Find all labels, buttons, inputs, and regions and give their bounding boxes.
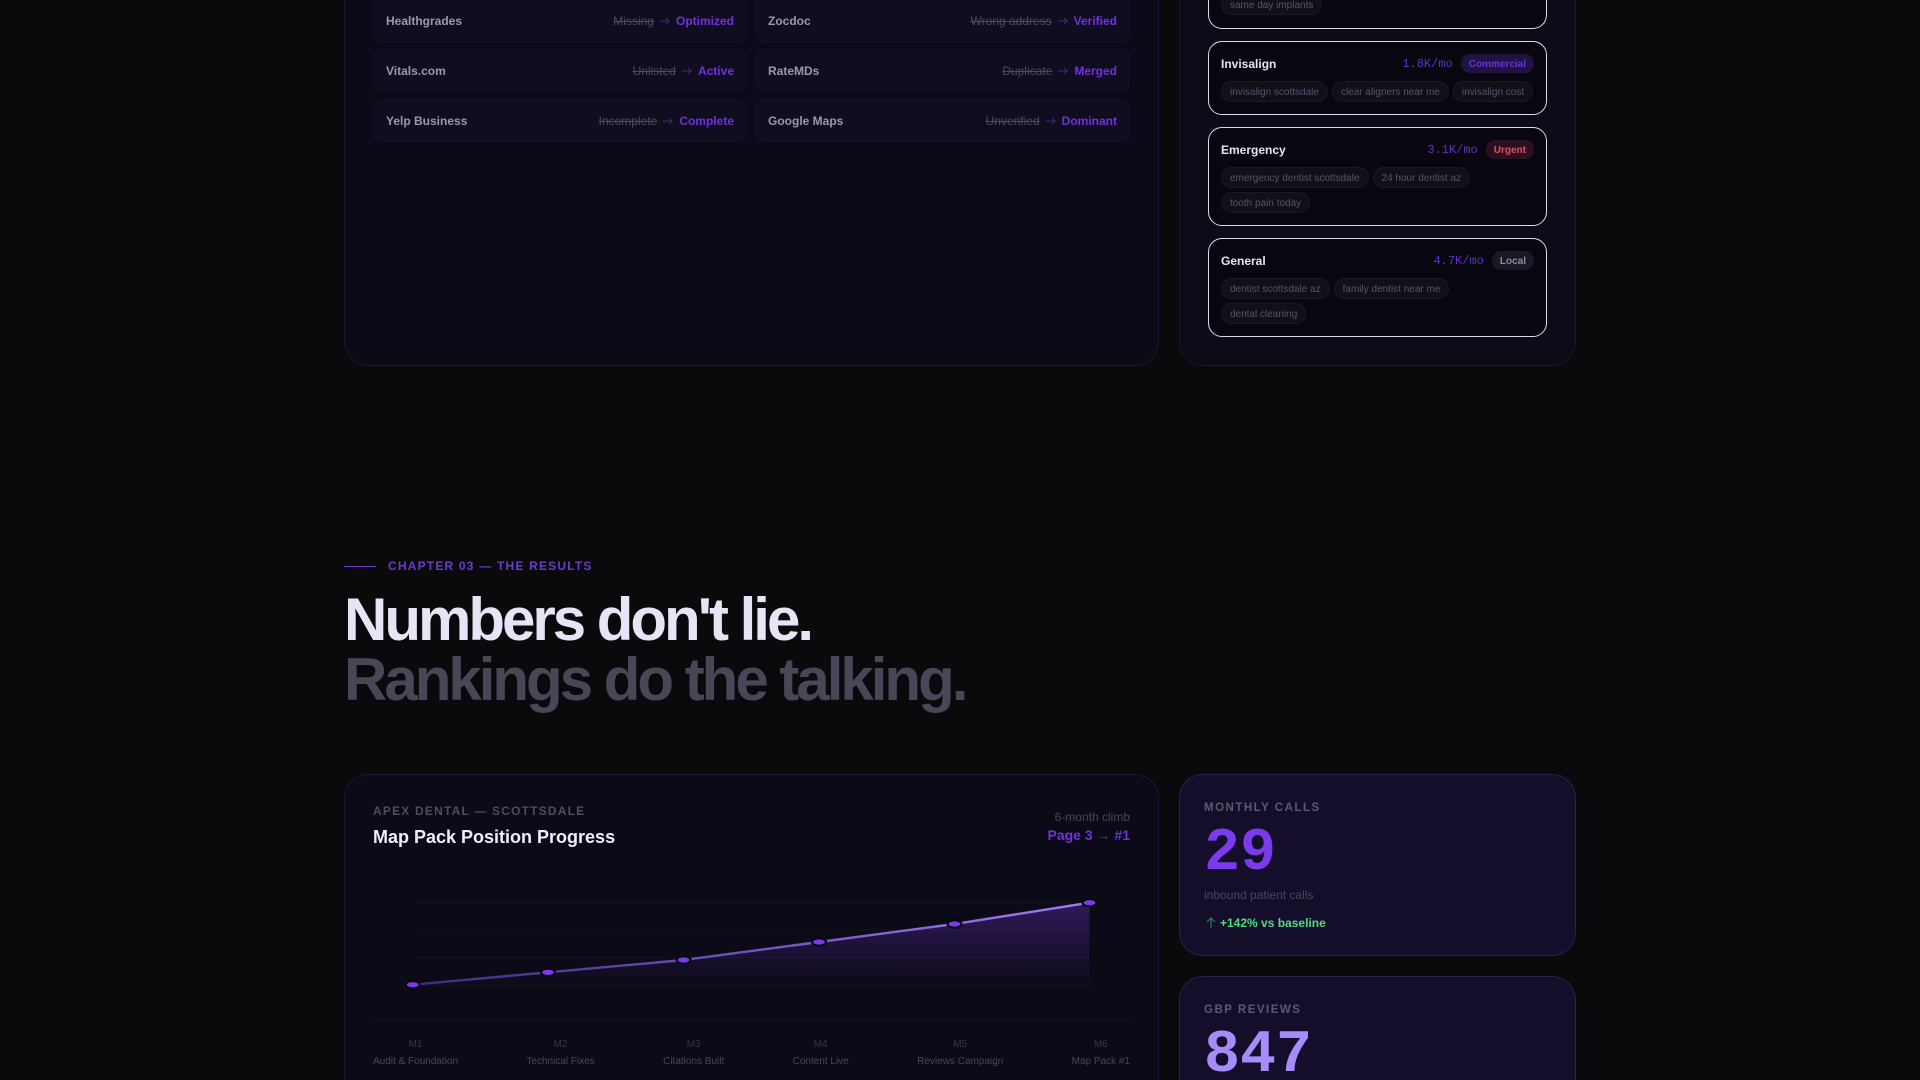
stat value: 29 <box>1204 820 1276 888</box>
citation row: Zocdoc: Zocdoc <box>768 14 811 28</box>
stat card: GBP reviews <box>1179 976 1576 1080</box>
keyword chips: dental cleaning <box>1230 309 1297 320</box>
ranking change: Page 3 → #1 <box>1048 827 1130 843</box>
icon: up arrow <box>1206 917 1216 928</box>
citation row: RateMDs <box>755 49 1130 92</box>
milestone M6: M6 <box>1094 1039 1108 1050</box>
card header: Emergency <box>1221 142 1286 156</box>
citation row: Healthgrades <box>373 0 747 43</box>
timeframe label: 6-month climb <box>1055 810 1130 824</box>
citation row: Zocdoc: Wrong address <box>970 14 1052 28</box>
heading line two: Rankings do the talking. <box>344 646 965 713</box>
milestone M2 <box>526 1039 595 1067</box>
citation row: Vitals.com <box>373 49 747 92</box>
chapter heading <box>344 586 965 713</box>
card header: Commercial <box>1469 59 1526 70</box>
citation row: RateMDs: RateMDs <box>768 64 819 78</box>
panel: keyword clusters <box>1179 0 1576 366</box>
milestone M3: M3 <box>687 1039 701 1050</box>
chart timeframe <box>1048 810 1130 843</box>
milestone M4: M4 <box>814 1039 828 1050</box>
stat description: inbound patient calls <box>1204 888 1313 902</box>
citation row: RateMDs: Duplicate <box>1002 64 1052 78</box>
milestone M1 <box>373 1039 458 1067</box>
keyword chips: invisalign scottsdale <box>1230 87 1319 98</box>
citation row: Google Maps <box>755 99 1130 142</box>
eyebrow rule <box>344 566 376 567</box>
card header: Local <box>1500 256 1526 267</box>
milestone M3 <box>663 1039 724 1067</box>
keyword card: General <box>1208 238 1547 337</box>
keyword chips: invisalign cost <box>1462 87 1524 98</box>
milestone M6 <box>1072 1039 1130 1067</box>
card header: 4.7K/mo <box>1433 254 1484 268</box>
milestone M3: Citations Built <box>663 1056 724 1067</box>
citation row: Vitals.com: Vitals.com <box>386 64 446 78</box>
card header: General <box>1221 254 1266 268</box>
citation row: Yelp Business <box>373 99 747 142</box>
citation row: Zocdoc <box>755 0 1130 43</box>
keyword chips <box>1221 278 1449 324</box>
keyword chips: clear aligners near me <box>1341 87 1440 98</box>
keyword chips: tooth pain today <box>1230 198 1301 209</box>
citation row: Google Maps: Google Maps <box>768 114 843 128</box>
trend line <box>413 903 1090 985</box>
keyword chips <box>1221 167 1470 213</box>
citation row: Healthgrades: Healthgrades <box>386 14 462 28</box>
milestone M1: M1 <box>409 1039 422 1050</box>
keyword chips <box>1221 81 1533 102</box>
card header: Urgent <box>1494 145 1526 156</box>
milestone M2: M2 <box>554 1039 568 1050</box>
citation row: Zocdoc: Verified <box>1074 14 1117 28</box>
keyword chips: 24 hour dentist az <box>1382 173 1461 184</box>
milestone M5: Reviews Campaign <box>917 1056 1003 1067</box>
card header: Invisalign <box>1221 56 1276 70</box>
citation row: Vitals.com: Active <box>698 64 734 78</box>
line chart <box>373 900 1130 1021</box>
milestone labels <box>373 1039 1130 1067</box>
chip: same day implants <box>1221 0 1322 15</box>
keyword card: Invisalign <box>1208 41 1547 115</box>
keyword card: implants (cropped) <box>1208 0 1547 29</box>
milestone M5 <box>917 1039 1003 1067</box>
card header <box>1221 251 1534 270</box>
data points <box>406 899 1096 988</box>
panel: citation cleanup <box>344 0 1159 366</box>
trend text: +142% vs baseline <box>1220 916 1326 930</box>
chart title: Map Pack Position Progress <box>373 827 615 847</box>
card header <box>1221 140 1534 159</box>
citation row: Vitals.com: Unlisted <box>633 64 676 78</box>
stat label: GBP REVIEWS <box>1204 1004 1301 1016</box>
card header: 1.8K/mo <box>1402 56 1453 70</box>
chip: same day implants: same day implants <box>1230 0 1313 11</box>
keyword chips: family dentist near me <box>1343 284 1440 295</box>
milestone M1: Audit & Foundation <box>373 1056 458 1067</box>
stat card: monthly calls <box>1179 774 1576 956</box>
chart eyebrow: APEX DENTAL — SCOTTSDALE <box>373 804 585 818</box>
milestone M2: Technical Fixes <box>526 1056 595 1067</box>
milestone M5: M5 <box>953 1039 967 1050</box>
stat trend <box>1206 916 1326 930</box>
milestone M4: Content Live <box>793 1056 849 1067</box>
citation row: Healthgrades: Optimized <box>676 14 734 28</box>
panel: map pack progress chart <box>344 774 1159 1080</box>
stat label: MONTHLY CALLS <box>1204 802 1321 814</box>
milestone M4 <box>793 1039 849 1067</box>
citation row: Google Maps: Dominant <box>1062 114 1117 128</box>
keyword chips: emergency dentist scottsdale <box>1230 173 1360 184</box>
card header: 3.1K/mo <box>1427 142 1478 156</box>
card header <box>1221 54 1534 73</box>
keyword card: Emergency <box>1208 127 1547 226</box>
citation row: Google Maps: Unverified <box>986 114 1040 128</box>
keyword chips: dentist scottsdale az <box>1230 284 1321 295</box>
citation row: Yelp Business: Yelp Business <box>386 114 467 128</box>
citation row: Healthgrades: Missing <box>613 14 654 28</box>
heading line one: Numbers don't lie. <box>344 586 811 653</box>
citation row: RateMDs: Merged <box>1074 64 1117 78</box>
area fill <box>413 903 1090 988</box>
citation row: Yelp Business: Complete <box>679 114 734 128</box>
milestone M6: Map Pack #1 <box>1072 1056 1130 1067</box>
eyebrow text: CHAPTER 03 — THE RESULTS <box>388 559 593 573</box>
citation row: Yelp Business: Incomplete <box>599 114 657 128</box>
